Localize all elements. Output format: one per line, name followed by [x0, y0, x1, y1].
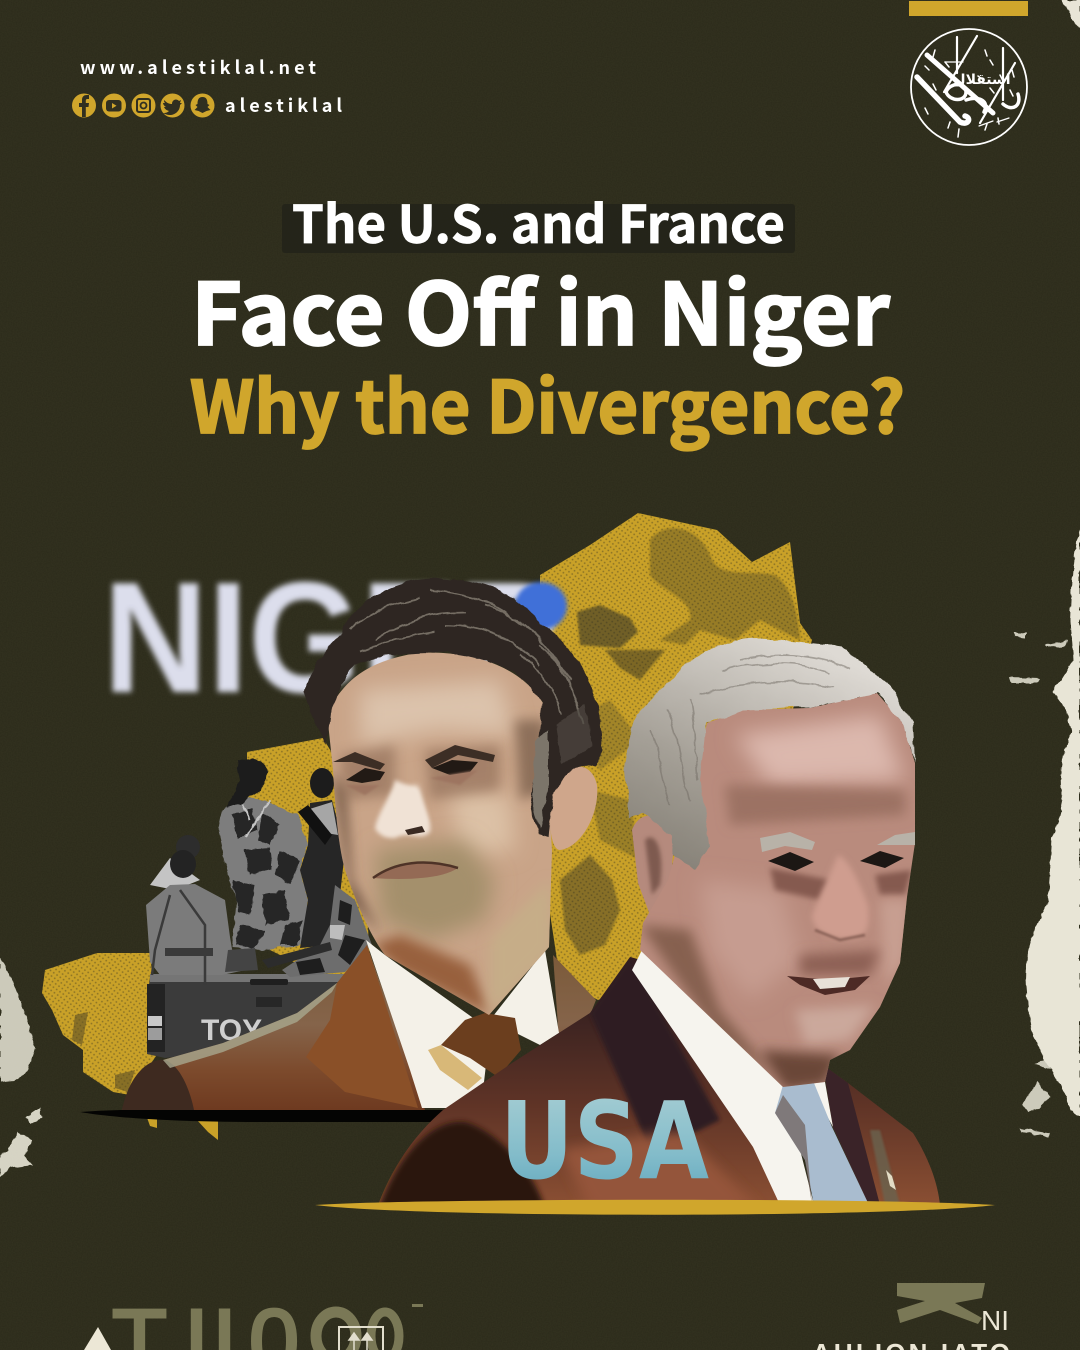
eyes — [345, 760, 478, 795]
shirt — [632, 950, 833, 1205]
soldier seated front — [146, 850, 258, 985]
icon: youtube — [102, 94, 126, 118]
website url: www.alestiklal.net — [80, 54, 316, 80]
face — [640, 693, 915, 1087]
suit tone layers — [378, 957, 900, 1210]
title line 2: Face Off in Niger — [191, 245, 891, 370]
pickup truck: TOY — [201, 1014, 262, 1047]
tie — [441, 1013, 521, 1077]
icon: twitter — [160, 94, 184, 118]
ghost stamp mark bottom right — [812, 1283, 1010, 1350]
nose — [375, 780, 430, 838]
face tone layers — [640, 715, 912, 1090]
hair — [305, 578, 603, 838]
ghost stamp text bottom left — [84, 1292, 423, 1350]
face tone layers — [333, 680, 552, 1015]
blurred NIGER text: NIGER — [103, 550, 563, 726]
social icons — [72, 94, 214, 118]
niger map — [42, 513, 812, 1140]
icon: snapchat — [190, 94, 214, 118]
torn paper edge: left — [0, 957, 42, 1177]
lapel pin — [886, 1170, 896, 1190]
soldier seated camouflage right — [262, 885, 372, 977]
nose — [812, 855, 869, 939]
tie — [775, 1083, 869, 1205]
face — [327, 653, 552, 1015]
logo emblem: استقلال — [953, 72, 1011, 88]
soldier standing camouflage — [218, 759, 308, 950]
title line 1: The U.S. and France — [292, 183, 785, 258]
hair — [625, 638, 915, 870]
top accent bar — [909, 1, 1028, 16]
figure: Macron — [122, 578, 603, 1110]
suit — [378, 957, 940, 1205]
figure: Biden — [378, 638, 940, 1210]
ear — [632, 815, 675, 937]
suit — [122, 945, 596, 1110]
mouth — [787, 976, 870, 995]
pickup truck — [147, 974, 345, 1058]
ear — [549, 766, 597, 850]
USA label: USA — [500, 1080, 709, 1204]
tie fold — [428, 1045, 482, 1090]
mouth — [373, 863, 458, 879]
eyes — [768, 851, 904, 871]
map camouflage patches — [560, 528, 800, 955]
torn paper edge: right — [1010, 0, 1080, 1137]
logo emblem — [911, 29, 1027, 145]
icon: instagram — [132, 94, 156, 118]
social handle: alestiklal — [225, 92, 342, 118]
eyebrows — [760, 832, 915, 852]
soldier rear with strap — [298, 768, 345, 948]
gold ground ellipse — [315, 1200, 995, 1215]
title line 3: Why the Divergence? — [190, 349, 905, 454]
shirt — [366, 940, 559, 1108]
eyebrows — [333, 745, 495, 770]
tie shading — [775, 1095, 812, 1205]
ground shadow: Macron — [80, 1110, 450, 1122]
ear shadow — [645, 837, 661, 895]
soldier seated behind — [150, 835, 200, 890]
icon: facebook — [72, 94, 96, 118]
ghost stamp mark bottom right: NI — [981, 1305, 1009, 1336]
soldiers and pickup truck — [146, 759, 372, 1058]
